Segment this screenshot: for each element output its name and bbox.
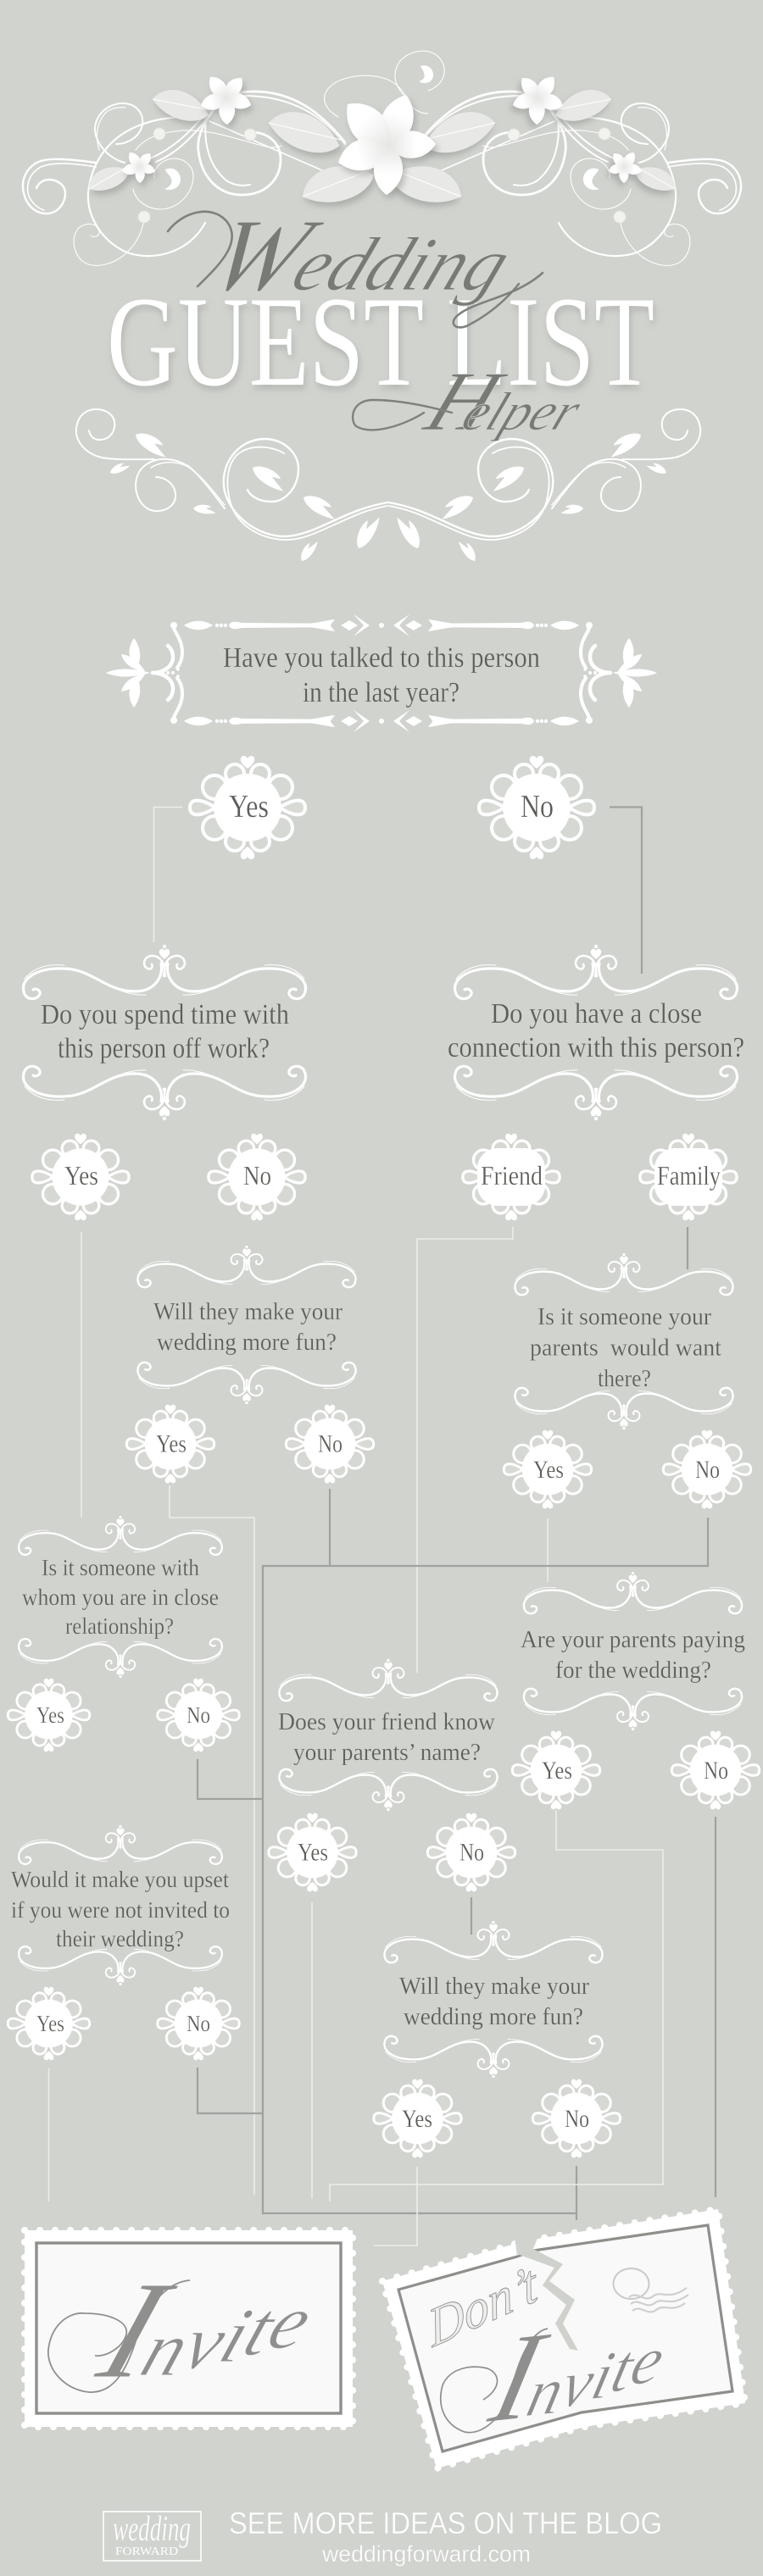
stamp: Don't Invite, torn	[382, 2209, 745, 2468]
logo: wedding forward: wedding	[113, 2510, 191, 2549]
answer: Yes, close relationship	[8, 1679, 90, 1752]
answer: No, knows name: No	[459, 1839, 484, 1866]
answer: No, close relationship	[158, 1679, 239, 1752]
question: upset if not invited: their wedding?	[56, 1926, 184, 1951]
connector: No to close connection	[610, 807, 642, 974]
answer: Yes, spends time: Yes	[64, 1160, 98, 1191]
answer: No, parents paying	[671, 1731, 760, 1809]
question: more fun, second	[384, 1921, 603, 2078]
answer: Yes, parents paying: Yes	[542, 1757, 572, 1785]
question: close relationship: whom you are in close	[22, 1585, 219, 1610]
connector: spends time yes to close relationship	[81, 1232, 82, 1518]
connector: parents paying yes to Invite	[330, 1810, 663, 2201]
question frame: talked in the last year	[106, 614, 657, 732]
question: close connection	[448, 945, 744, 1120]
answer: Family	[640, 1134, 737, 1220]
connector: knows name no to more fun	[471, 1897, 472, 1935]
question: close connection: Do you have a close	[491, 998, 702, 1030]
answer: Yes, more fun second: Yes	[402, 2105, 432, 2133]
answer: No, more fun second: No	[565, 2105, 589, 2133]
connector: knows name yes to Invite	[311, 1902, 313, 2199]
question: friend knows parents' name: Does your friend know	[278, 1708, 495, 1735]
answer: Yes, close relationship: Yes	[36, 1702, 64, 1728]
answer: No, spends time	[209, 1134, 305, 1220]
question: parents paying	[521, 1572, 745, 1730]
answer: No, close relationship: No	[187, 1702, 210, 1728]
title: Wedding: Wedding	[194, 198, 532, 313]
question: more fun: wedding more fun?	[157, 1329, 337, 1356]
answer: Family: Family	[657, 1160, 721, 1191]
question: parents paying: Are your parents paying	[521, 1626, 745, 1653]
question: spend time off work: this person off work?	[58, 1033, 270, 1064]
answer: No, more fun	[286, 1405, 374, 1483]
connector: more fun yes to Invite stamp	[374, 2167, 417, 2246]
footer call to action	[229, 2506, 662, 2567]
question frame: talked in the last year: in the last year?	[303, 677, 459, 708]
question: spend time off work: Do you spend time with	[41, 999, 289, 1030]
connector: parents want yes to parents paying	[547, 1518, 549, 1582]
answer: Yes, more fun	[126, 1405, 214, 1483]
answer: Yes, upset	[8, 1987, 90, 2060]
question: upset if not invited	[11, 1825, 230, 1985]
question: more fun, second: wedding more fun?	[404, 2003, 583, 2030]
stamp: Invite	[25, 2230, 353, 2427]
answer: Friend: Friend	[481, 1160, 543, 1191]
answer: No, parents paying: No	[704, 1757, 728, 1785]
connector: dark route to Don't Invite	[198, 1489, 708, 2213]
question: parents would want: parents would want	[530, 1334, 721, 1361]
stamp: Don't Invite, torn: nvite	[520, 2322, 671, 2431]
answer: No, parents want	[663, 1430, 751, 1508]
question: parents would want: there?	[598, 1365, 651, 1392]
question: upset if not invited: if you were not invited to	[11, 1897, 230, 1923]
connector: Yes to spend time	[154, 807, 182, 942]
answer: Yes, spends time	[32, 1134, 129, 1220]
logo: wedding forward	[103, 2510, 201, 2561]
answer: No, upset	[158, 1987, 239, 2060]
stamp: Invite: I	[81, 2252, 192, 2407]
question: more fun	[137, 1246, 356, 1404]
answer: Yes, more fun: Yes	[156, 1430, 187, 1457]
answer: No, spends time: No	[243, 1160, 271, 1191]
answer: Yes, parents want	[504, 1430, 592, 1508]
answer: Yes: Yes	[229, 789, 269, 824]
bottom header flourish	[76, 409, 700, 564]
question: parents would want: Is it someone your	[537, 1303, 711, 1330]
connector: Friend to know parents name	[417, 1227, 513, 1673]
title: Helper: Helper	[412, 355, 601, 448]
connector: parents paying no to Don't Invite	[715, 1817, 716, 2197]
connector: No to Don't Invite	[576, 2166, 577, 2220]
question: friend knows parents' name	[278, 1659, 498, 1811]
answer: No, more fun: No	[318, 1430, 343, 1457]
answer: Yes, parents want: Yes	[533, 1456, 564, 1484]
question: parents would want	[515, 1253, 733, 1430]
question frame: talked in the last year: Have you talked to this person	[223, 642, 540, 674]
answer: No	[479, 756, 594, 859]
answer: Yes	[190, 756, 305, 859]
connector: upset yes to Invite	[47, 2068, 49, 2201]
footer call to action: weddingforward.com	[321, 2541, 531, 2567]
connector: Family to parents want	[687, 1227, 688, 1269]
answer: Yes, knows name: Yes	[298, 1839, 328, 1866]
question: spend time off work	[23, 945, 306, 1120]
stamp: Invite: nvite	[131, 2279, 324, 2392]
stamp: Don't Invite, torn: Don’t	[423, 2251, 543, 2359]
header ornament: flowers, leaves and swirls	[23, 51, 741, 265]
answer: Yes, more fun second	[374, 2079, 461, 2157]
question: more fun, second: Will they make your	[399, 1973, 589, 2000]
question: parents paying: for the wedding?	[555, 1657, 711, 1684]
question: close relationship: Is it someone with	[42, 1555, 199, 1580]
question: friend knows parents' name: your parents’ name?	[293, 1739, 481, 1766]
answer: No, parents want: No	[695, 1456, 720, 1484]
connector: more fun yes to Invite	[170, 1485, 254, 2195]
answer: Friend	[463, 1134, 560, 1220]
footer call to action: SEE MORE IDEAS ON THE BLOG	[229, 2506, 662, 2540]
answer: Yes, parents paying	[512, 1731, 600, 1809]
answer: No: No	[521, 789, 554, 824]
answer: No, upset: No	[187, 2011, 210, 2036]
answer: Yes, upset: Yes	[36, 2011, 64, 2036]
question: close relationship	[19, 1516, 222, 1678]
answer: Yes, knows name	[269, 1813, 356, 1891]
answer: No, more fun second	[532, 2079, 621, 2157]
question: upset if not invited: Would it make you upset	[11, 1867, 229, 1892]
logo: wedding forward: FORWARD	[115, 2545, 178, 2557]
stamp: Don't Invite, torn: I	[478, 2305, 560, 2450]
answer: No, knows name	[427, 1813, 515, 1891]
question: more fun: Will they make your	[153, 1298, 343, 1325]
question: close relationship: relationship?	[65, 1613, 174, 1639]
